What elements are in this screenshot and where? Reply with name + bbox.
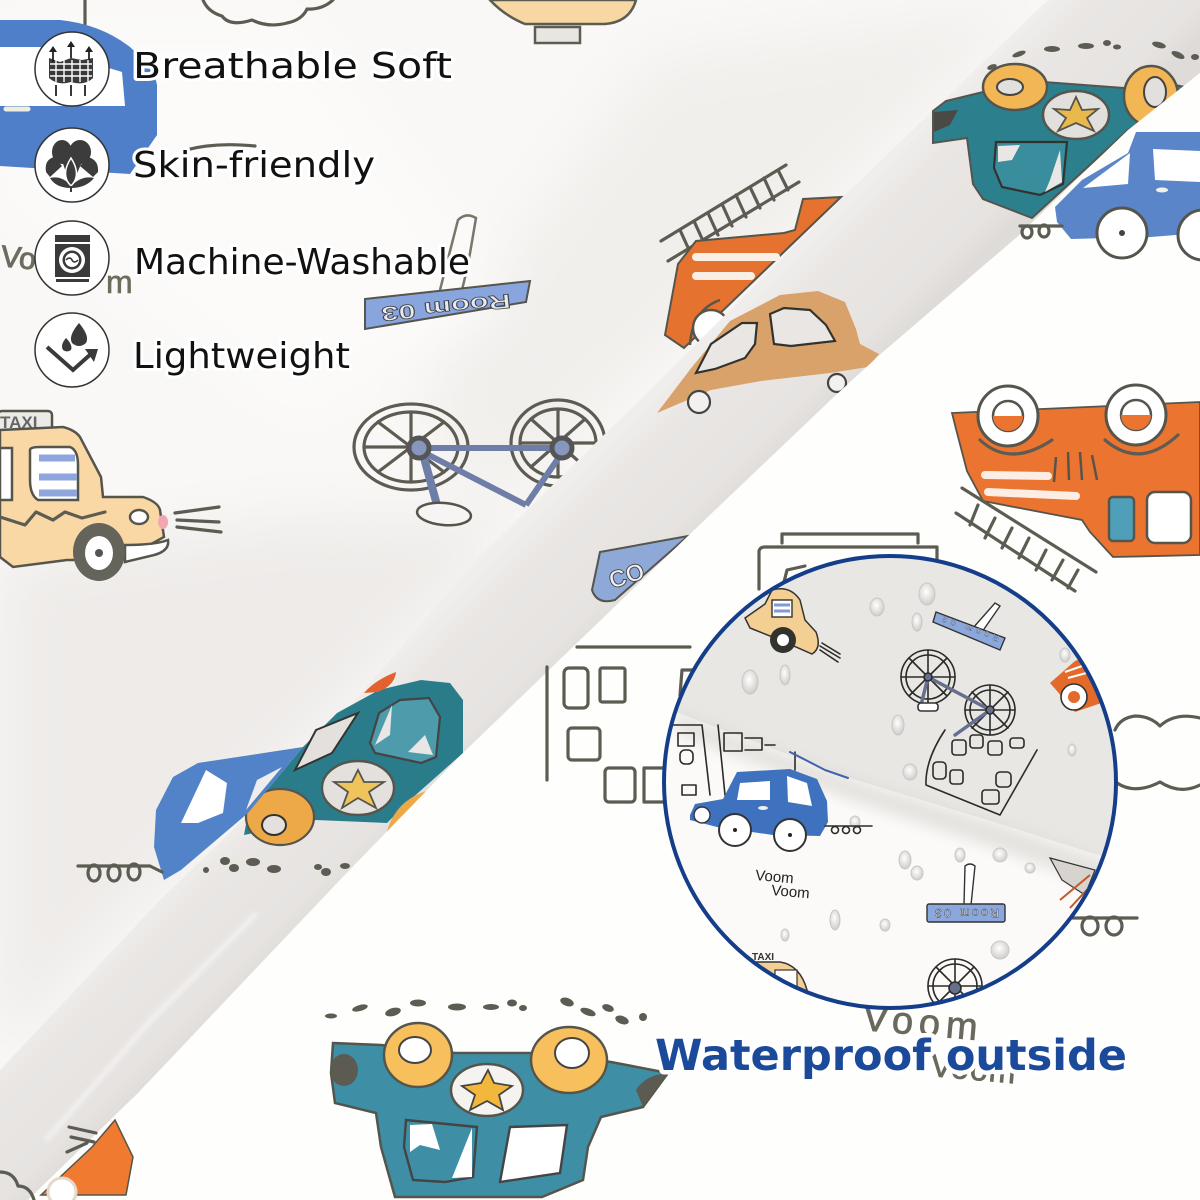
lens blue car — [690, 769, 828, 851]
lens sign — [933, 603, 1005, 650]
teal police car, top right — [933, 64, 1200, 218]
icon: washing machine — [35, 221, 109, 295]
lens sign 2: Room 03 — [935, 906, 999, 920]
yellow vehicle, top — [490, 0, 636, 43]
CO sign on fold: CO — [606, 558, 648, 595]
inner crease highlight on fold band — [46, 913, 257, 1140]
building, centre — [547, 647, 696, 802]
lens taxi — [745, 589, 840, 662]
caption: Waterproof outside: Waterproof outside — [655, 1031, 1127, 1081]
police car, centre left: blue rear — [154, 747, 303, 880]
blue car, top left — [0, 0, 157, 174]
lens lower taxi: TAXI — [752, 952, 774, 963]
orange truck fragment, bottom left — [0, 1120, 133, 1200]
large Voom text, bottom: Voom — [861, 997, 979, 1049]
sign, upper centre — [365, 215, 530, 329]
feature: Breathable Soft: Breathable Soft — [133, 46, 452, 87]
large Voom text, bottom: Voom — [929, 1047, 1017, 1090]
dotted line above police car, top right — [986, 40, 1199, 71]
taxi, left: TAXI — [0, 413, 37, 432]
building, behind lens — [759, 534, 937, 590]
icon: breathable — [35, 32, 109, 106]
orange truck, right — [952, 385, 1200, 557]
feature: Machine-Washable: Machine-Washable — [134, 242, 470, 283]
large Voom text, bottom — [861, 997, 1017, 1090]
police car, centre left: dots — [203, 857, 350, 876]
blue car, top right — [1055, 132, 1200, 260]
magnified lens — [660, 550, 1120, 1020]
lens building — [926, 730, 1037, 815]
spring squiggle, top right — [1020, 225, 1062, 238]
dotted line above teal car, bottom — [325, 996, 647, 1026]
cloud, top — [203, 0, 333, 25]
lens Voom text — [756, 870, 809, 898]
feature: Lightweight — [35, 313, 350, 387]
bicycle — [354, 400, 605, 527]
lens spring — [825, 826, 872, 834]
droplets — [742, 583, 1076, 959]
feature: Lightweight: Lightweight — [133, 336, 350, 377]
feature: Breathable Soft — [35, 32, 452, 106]
stitch dashes near top left — [186, 145, 255, 150]
lens bicycle — [901, 650, 1015, 735]
lens red ladder — [1050, 858, 1096, 908]
lens sign: Room 03 — [941, 614, 1001, 644]
sign, upper centre: Room 03 — [380, 289, 512, 324]
ladder, right — [956, 488, 1096, 591]
CO sign on fold — [592, 536, 688, 601]
tan car, upper centre — [657, 291, 879, 413]
lens Voom text: Voom — [755, 867, 794, 887]
om text, upper left: m — [106, 264, 133, 300]
Voom text, upper left: Vo — [0, 240, 38, 277]
fire truck, upper centre — [661, 165, 841, 348]
lens left buildings — [672, 725, 848, 795]
lens Voom text: Voom — [771, 882, 810, 902]
lens lower wheel — [927, 958, 983, 1002]
spring squiggle, left — [78, 864, 162, 881]
lens sign 2 — [927, 864, 1005, 922]
police car, centre left: teal body — [244, 672, 463, 845]
cloud, right — [1115, 716, 1200, 789]
feature: Machine-Washable — [35, 221, 470, 295]
icon: cotton — [35, 128, 109, 202]
icon: water repellent — [35, 313, 109, 387]
spring squiggle, right — [1073, 917, 1137, 935]
feature: Skin-friendly: Skin-friendly — [133, 145, 375, 186]
teal car, bottom — [330, 1023, 668, 1197]
lens orange car — [1050, 660, 1100, 712]
taxi, left — [0, 411, 221, 581]
lens lower taxi — [752, 953, 808, 990]
feature: Skin-friendly — [35, 128, 375, 202]
